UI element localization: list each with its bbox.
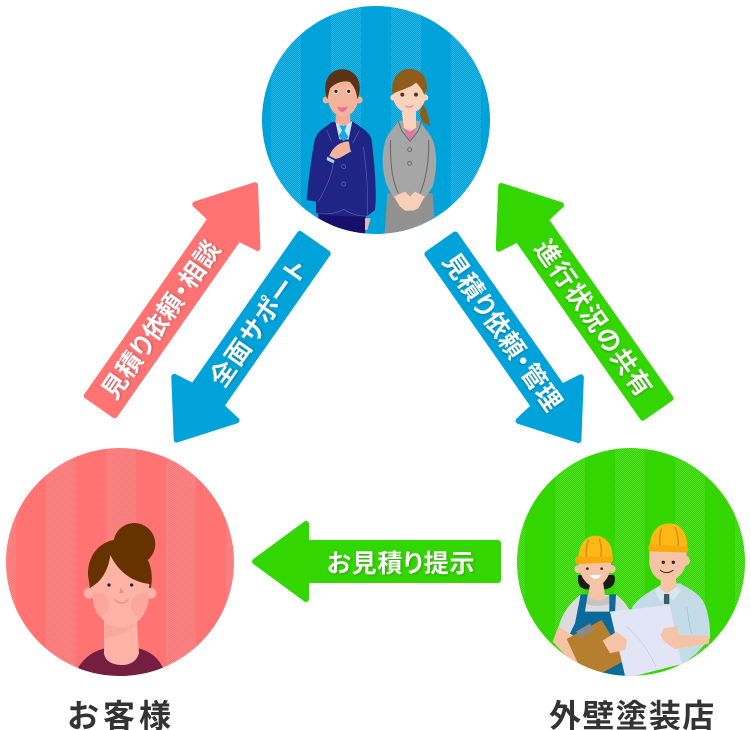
arrow: quote presentation <box>255 524 498 599</box>
hands <box>603 632 627 653</box>
arrow: progress sharing: 進行状況の共有 <box>529 235 658 403</box>
arrow: quote request and consultation: 見積り依頼・相談 <box>97 236 227 404</box>
female worker <box>553 536 629 677</box>
circle: customer <box>6 448 234 676</box>
blueprint paper <box>610 605 682 678</box>
arrow: quote request and management <box>410 222 610 462</box>
circle: painting contractor <box>517 448 745 676</box>
man in navy suit <box>307 69 376 235</box>
woman in grey suit <box>383 69 436 235</box>
illustration: woman with hair bun <box>78 523 163 680</box>
arrow: full support <box>146 222 345 461</box>
arrow: full support: 全面サポート <box>205 254 314 392</box>
arrow: quote request and management: 見積り依頼・管理 <box>437 248 567 417</box>
arrow: progress sharing <box>470 164 688 430</box>
illustration: man and woman in suits <box>307 69 436 235</box>
illustration: two workers in helmets <box>553 523 710 678</box>
clipboard <box>567 620 626 674</box>
arrow: quote request and consultation <box>70 163 286 427</box>
circle: support staff <box>262 6 490 235</box>
arrow: quote presentation: お見積り提示 <box>327 550 475 578</box>
male worker <box>632 523 710 667</box>
